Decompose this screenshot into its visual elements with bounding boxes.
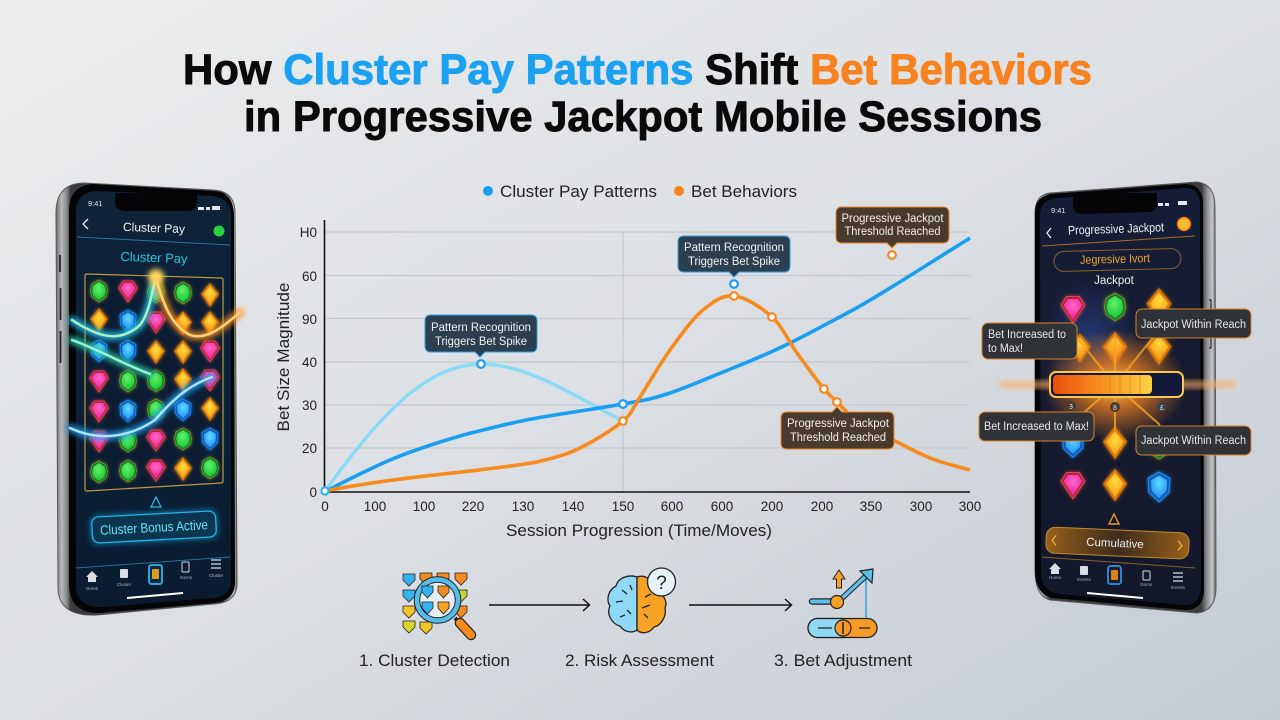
x axis tick labels: [321, 499, 981, 514]
header: [1042, 218, 1195, 287]
legend: Cluster Pay Patterns: [500, 182, 657, 201]
x axis tick labels: 300: [959, 499, 981, 514]
coin row: £: [1160, 405, 1164, 412]
label: bet increased to to max: to Max!: [988, 343, 1023, 355]
arrow: [689, 599, 792, 611]
x axis tick labels: 0: [321, 499, 329, 514]
bottom navigation: [76, 557, 230, 598]
process flow: [359, 568, 912, 670]
legend: Bet Behaviors: [691, 182, 797, 201]
status bar: 9:41: [88, 199, 103, 208]
x axis title: Session Progression (Time/Moves): [506, 522, 772, 540]
label: bet increased to to max: Bet Increased to: [988, 329, 1066, 341]
callout: pattern recognition 1: Triggers Bet Spike: [435, 336, 527, 348]
line chart: [275, 207, 981, 540]
label: bet increased to max: [979, 412, 1094, 441]
x axis tick labels: 100: [413, 499, 435, 514]
flow labels: 1. Cluster Detection: [359, 652, 510, 670]
y axis tick labels: 0: [309, 485, 317, 500]
bottom navigation: Cluster: [117, 582, 132, 587]
y axis title: Bet Size Magnitude: [275, 282, 293, 432]
triangle marker: [1109, 514, 1119, 524]
status bar: [88, 199, 220, 210]
label: bet increased to max: Bet Increased to Max!: [984, 421, 1089, 433]
coin row: 3: [1069, 404, 1073, 411]
x axis tick labels: 100: [364, 499, 386, 514]
callout: pattern recognition 2: Triggers Bet Spike: [688, 256, 780, 268]
label: jackpot within reach upper: [1136, 309, 1251, 338]
y axis tick labels: [300, 225, 317, 500]
x axis tick labels: 300: [910, 499, 932, 514]
orange bet behaviors curve: [325, 296, 970, 491]
gems: [1061, 289, 1171, 502]
left phone: [56, 183, 240, 615]
blue cluster pay curve: [325, 238, 970, 492]
coin row: 8: [1113, 405, 1117, 412]
x axis tick labels: 130: [512, 499, 534, 514]
bottom navigation: Gems: [180, 575, 193, 580]
gem grid: [85, 274, 223, 491]
progress bar: [1050, 372, 1183, 397]
callout: pattern recognition 1: Pattern Recognition: [431, 322, 531, 334]
cumulative button: Cumulative: [1086, 537, 1144, 551]
bottom navigation: Greek: [86, 586, 99, 591]
jackpot burst: [1000, 330, 1235, 440]
callout: jackpot threshold lower: Threshold Reached: [790, 432, 886, 444]
header: Cluster Pay: [123, 220, 185, 236]
x axis tick labels: 350: [860, 499, 882, 514]
callout: jackpot threshold lower: [781, 407, 894, 449]
y axis tick labels: 20: [302, 441, 317, 456]
y axis tick labels: H0: [300, 225, 317, 240]
icon: cluster detection: [403, 573, 471, 635]
data points: [321, 251, 896, 495]
title: How Cluster Pay Patterns Shift Bet Behaviors: [183, 46, 1092, 94]
light trails: [70, 269, 240, 436]
title: [183, 46, 1092, 141]
x axis tick labels: 200: [761, 499, 783, 514]
bottom navigation: Home: [1049, 575, 1061, 580]
x axis tick labels: 600: [711, 499, 733, 514]
arrow: [489, 599, 590, 611]
bottom navigation: Cluster: [209, 573, 224, 578]
icon: risk assessment brain: ?: [656, 573, 667, 594]
x axis tick labels: 150: [612, 499, 634, 514]
bottom navigation: Events: [1171, 585, 1186, 590]
header: Jegresive Ivort: [1080, 251, 1151, 267]
header: Cluster Pay: [120, 249, 188, 266]
triangle marker: [151, 497, 161, 507]
light blue pattern curve: [325, 364, 623, 491]
callout: pattern recognition 1: [425, 315, 537, 357]
label: bet increased to to max: [982, 323, 1077, 359]
icon: bet adjustment slider: [808, 569, 877, 638]
icon: risk assessment brain: [608, 568, 676, 633]
callout: jackpot threshold lower: Progressive Jackpot: [787, 418, 890, 430]
bottom navigation: [1042, 557, 1195, 598]
label: jackpot within reach lower: Jackpot Within Reach: [1141, 435, 1246, 447]
x axis tick labels: 200: [811, 499, 833, 514]
bottom navigation: Gems: [1140, 582, 1153, 587]
y axis tick labels: 30: [302, 398, 317, 413]
flow labels: 2. Risk Assessment: [565, 652, 714, 670]
callout: pattern recognition 2: Pattern Recognition: [684, 242, 784, 254]
callout: jackpot threshold top: Progressive Jackpot: [842, 213, 944, 225]
status bar: 9:41: [1051, 206, 1066, 215]
status bar: [1051, 201, 1187, 215]
label: jackpot within reach lower: [1136, 426, 1251, 455]
bottom navigation: Events: [1077, 577, 1092, 582]
legend: [483, 182, 797, 201]
flow labels: [359, 652, 912, 670]
callout: pattern recognition 2: [678, 236, 790, 277]
x axis tick labels: 140: [562, 499, 584, 514]
x axis tick labels: 600: [661, 499, 683, 514]
header: [77, 219, 230, 266]
callout: jackpot threshold top: [836, 207, 949, 248]
label: jackpot within reach upper: Jackpot Within Reach: [1141, 319, 1246, 331]
header: Progressive Jackpot: [1068, 220, 1165, 238]
header: Jackpot: [1094, 275, 1135, 287]
cluster bonus button: [89, 509, 219, 545]
x axis tick labels: 220: [462, 499, 484, 514]
title: in Progressive Jackpot Mobile Sessions: [244, 93, 1042, 141]
cumulative button: [1046, 527, 1189, 559]
y axis tick labels: 60: [302, 269, 317, 284]
cluster bonus button: Cluster Bonus Active: [100, 517, 208, 538]
coin row: [1066, 401, 1167, 412]
y axis tick labels: 40: [302, 355, 317, 370]
y axis tick labels: 90: [302, 312, 317, 327]
callout: jackpot threshold top: Threshold Reached: [844, 226, 940, 238]
right phone: [979, 182, 1251, 613]
flow labels: 3. Bet Adjustment: [774, 652, 912, 670]
